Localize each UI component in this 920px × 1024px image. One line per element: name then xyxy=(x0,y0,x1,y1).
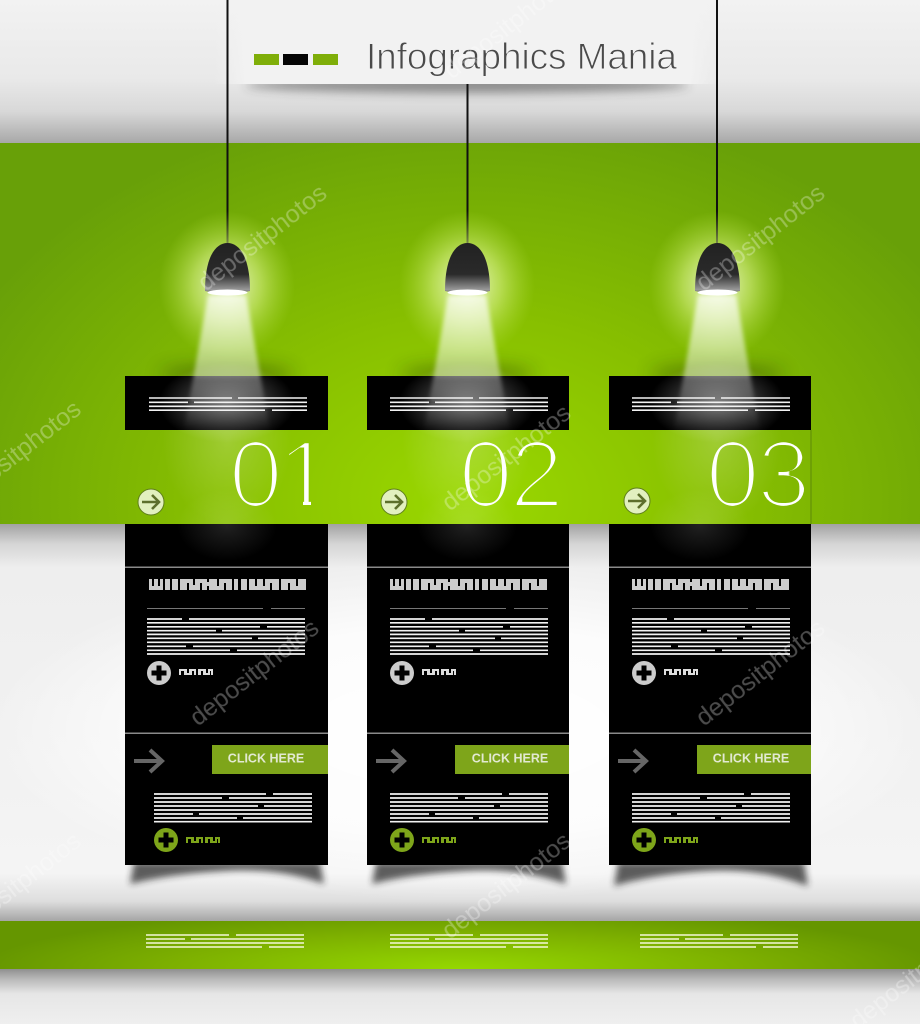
number xyxy=(234,442,311,506)
body glow xyxy=(177,489,277,561)
card 3 xyxy=(609,295,812,865)
background: top strip xyxy=(0,0,920,143)
thin rule xyxy=(632,608,790,610)
small label xyxy=(664,669,698,675)
divider 2 xyxy=(367,732,569,734)
title panel sheet xyxy=(215,0,720,84)
small green label xyxy=(186,837,220,843)
divider xyxy=(125,566,328,568)
heading xyxy=(390,579,547,590)
arrow badge xyxy=(624,488,650,514)
button xyxy=(212,745,328,774)
divider xyxy=(367,566,569,568)
heading xyxy=(632,579,789,590)
button: CLICK HERE xyxy=(228,752,304,766)
paragraph xyxy=(632,619,790,654)
body glow xyxy=(417,489,517,561)
plus icon xyxy=(147,661,171,685)
thin rule xyxy=(147,608,305,610)
watermarks: depositphotos xyxy=(184,614,324,732)
paragraph 2 xyxy=(632,794,790,822)
box glow xyxy=(399,363,535,443)
title: Infographics Mania xyxy=(366,36,677,77)
header lines xyxy=(632,398,790,410)
watermarks: depositphotos xyxy=(436,827,576,945)
green main band xyxy=(0,143,920,524)
plus icon xyxy=(390,661,414,685)
arrow xyxy=(618,750,646,772)
heading xyxy=(149,579,306,590)
background: middle light area xyxy=(0,524,920,921)
button: CLICK HERE xyxy=(713,752,789,766)
title panel shadow xyxy=(245,77,689,93)
lamp shades xyxy=(205,243,740,296)
lamp shade 3 xyxy=(695,243,740,296)
watermarks: depositphotos xyxy=(690,179,830,297)
divider 2 xyxy=(125,732,328,734)
arrow badge xyxy=(381,489,407,515)
body xyxy=(609,524,811,865)
box glow xyxy=(649,363,785,443)
watermarks: depositphotos xyxy=(192,179,332,297)
paragraph xyxy=(390,619,548,654)
header box xyxy=(367,376,569,430)
card shadows xyxy=(130,862,808,886)
divider 2 xyxy=(609,732,811,734)
arrow xyxy=(134,750,162,772)
number: 2 xyxy=(510,421,563,528)
button xyxy=(455,745,569,774)
paragraph 2 xyxy=(390,794,548,822)
watermarks: depositphotos xyxy=(690,614,830,732)
thin rule xyxy=(390,608,548,610)
card 2 xyxy=(367,295,569,865)
background: bottom strip xyxy=(0,969,920,1024)
footer text 1 xyxy=(146,935,304,947)
small label xyxy=(422,669,456,675)
body glow xyxy=(650,489,750,561)
small green label xyxy=(422,837,456,843)
box glow xyxy=(159,363,295,443)
card 1 xyxy=(125,295,331,865)
number: 0 xyxy=(229,421,282,528)
title marker bars xyxy=(254,54,338,65)
lamp wires xyxy=(226,0,718,246)
header lines xyxy=(390,398,548,410)
footer band xyxy=(0,921,920,969)
number: 1 xyxy=(278,421,331,528)
panel edge xyxy=(810,430,812,524)
number: 0 xyxy=(706,421,759,528)
header box xyxy=(125,376,328,430)
divider xyxy=(609,566,811,568)
footer text 3 xyxy=(640,935,798,947)
button xyxy=(697,745,811,774)
lamp 1 with light xyxy=(159,211,295,525)
number: 0 xyxy=(459,421,512,528)
lamp shade 1 xyxy=(205,243,250,296)
small green label xyxy=(664,837,698,843)
header lines xyxy=(149,398,307,410)
watermarks: depositphotos xyxy=(436,399,576,517)
lamp shade 2 xyxy=(445,243,490,296)
lamp 3 with light xyxy=(649,211,785,525)
lamp 2 with light xyxy=(399,211,535,525)
beam xyxy=(424,295,510,430)
green plus icon xyxy=(632,828,656,852)
number: 3 xyxy=(757,421,810,528)
plus icon xyxy=(632,661,656,685)
header box xyxy=(609,376,811,430)
arrow badge xyxy=(138,489,164,515)
paragraph xyxy=(147,619,305,654)
green plus icon xyxy=(390,828,414,852)
body xyxy=(367,524,569,865)
small label xyxy=(179,669,213,675)
beam xyxy=(674,295,760,430)
button: CLICK HERE xyxy=(472,752,548,766)
body xyxy=(125,524,328,865)
footer text 2 xyxy=(390,935,548,947)
title panel xyxy=(215,0,720,93)
beam xyxy=(184,295,270,430)
green plus icon xyxy=(154,828,178,852)
paragraph 2 xyxy=(154,794,312,822)
arrow xyxy=(376,750,404,772)
